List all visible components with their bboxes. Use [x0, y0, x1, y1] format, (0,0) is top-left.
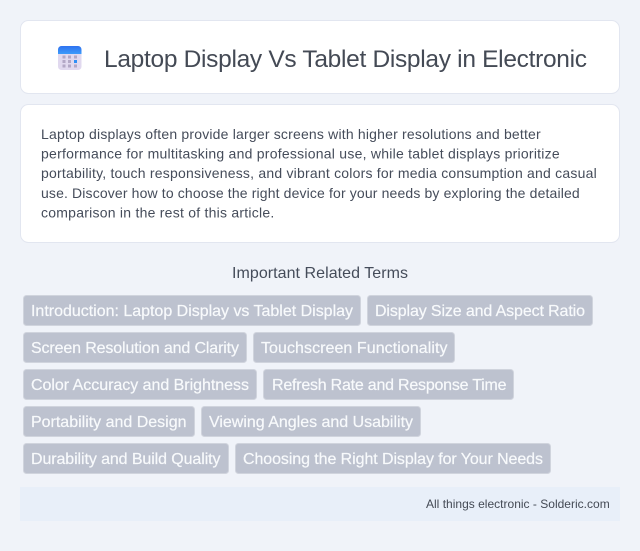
- tag: introduction: [24, 296, 360, 326]
- tag: portability: Portability and Design: [31, 414, 186, 431]
- tag: durability: Durability and Build Quality: [31, 451, 220, 468]
- tag: screen resolution: Screen Resolution and Clarity: [31, 340, 239, 357]
- tag: refresh rate: [264, 370, 514, 400]
- text block: intro: comparison in the rest of this article.: [41, 204, 274, 220]
- panel: header: [20, 20, 620, 94]
- tag: choosing: Choosing the Right Display for Your Needs: [243, 451, 543, 468]
- tag: durability: [24, 444, 228, 474]
- panel: term tags: [24, 296, 592, 474]
- tag: display size: Display Size and Aspect Ratio: [375, 303, 585, 320]
- tag: touchscreen: [254, 332, 454, 362]
- text block: intro: use. Discover how to choose the right device for your needs by exploring the detailed: [41, 185, 580, 201]
- heading: related terms: Important Related Terms: [232, 265, 408, 282]
- text block: intro: performance for multitasking and professional use, while tablet displays prioritize: [41, 146, 560, 162]
- icon: calendar grid: [58, 46, 82, 70]
- tag: choosing: [236, 444, 550, 474]
- tag: touchscreen: Touchscreen Functionality: [261, 340, 448, 357]
- panel: intro paragraph: [20, 104, 620, 242]
- text block: intro: [41, 126, 597, 220]
- tag: introduction: Introduction: Laptop Display vs Tablet Display: [31, 303, 353, 320]
- tag: portability: [24, 406, 194, 436]
- tag: color accuracy: [24, 370, 256, 400]
- footer: [20, 487, 620, 521]
- tag: screen resolution: [24, 332, 246, 362]
- title: Laptop Display Vs Tablet Display in Electronic: [104, 46, 587, 73]
- text block: intro: portability, touch responsiveness, and vibrant colors for media consumption and casual: [41, 165, 597, 181]
- tag: viewing angles: [202, 406, 420, 436]
- tag: display size: [368, 296, 592, 326]
- tag: color accuracy: Color Accuracy and Brightness: [31, 377, 249, 394]
- footer: All things electronic - Solderic.com: [426, 497, 610, 511]
- tag: viewing angles: Viewing Angles and Usability: [209, 414, 413, 431]
- tag: refresh rate: Refresh Rate and Response Time: [272, 377, 507, 394]
- text block: intro: Laptop displays often provide larger screens with higher resolutions and better: [41, 126, 541, 142]
